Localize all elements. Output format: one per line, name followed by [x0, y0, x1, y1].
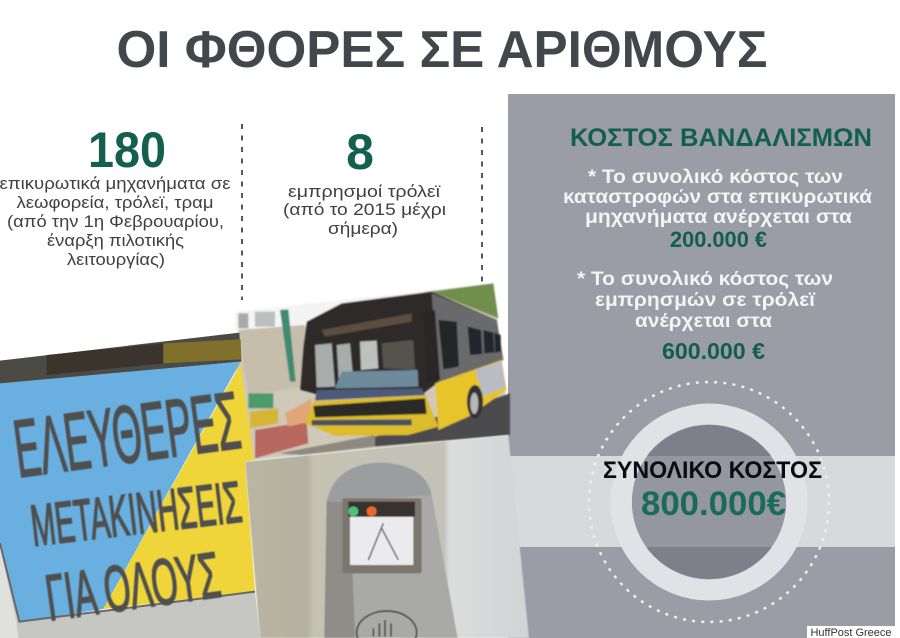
graffiti text: ΜΕΤΑΚΙΝΗΣΕΙΣ	[27, 470, 245, 559]
cost note: trolleys	[577, 268, 833, 364]
contactless symbol	[357, 611, 417, 638]
validator screen	[342, 498, 422, 573]
panel background	[508, 94, 895, 638]
validator arch	[324, 463, 458, 638]
dotted ring	[589, 382, 829, 622]
description 180: λεωφορεία, τρόλεϊ, τραμ	[16, 193, 214, 212]
number 180: 180	[88, 122, 166, 178]
description 8: εμπρησμοί τρόλεϊ	[288, 182, 441, 201]
cost note: trolleys: 600.000 €	[662, 338, 765, 364]
panel: vandalism costs	[508, 94, 895, 638]
total cost band	[508, 456, 895, 547]
total cost inner disc	[632, 425, 786, 579]
inner disc band tint	[632, 456, 786, 547]
panel heading: ΚΟΣΤΟΣ ΒΑΝΔΑΛΙΣΜΩΝ	[570, 124, 872, 152]
stat: 8 trolley arsons	[283, 124, 446, 238]
graffiti text: ΓΙΑ ΟΛΟΥΣ	[41, 538, 225, 635]
divider right	[481, 127, 483, 284]
cost note: trolleys: ανέρχεται στα	[635, 310, 772, 332]
description 180: (από την 1η Φεβρουαρίου,	[7, 212, 224, 231]
photo: graffiti sign: ΕΛΕΥΘΕΡΕΣ	[9, 375, 245, 495]
description 180: λειτουργίας)	[67, 250, 165, 269]
description 180: έναρξη πιλοτικής	[47, 231, 184, 250]
blue field	[0, 362, 241, 622]
photo: smashed ticket validator	[245, 435, 529, 638]
cost note: validators	[563, 166, 872, 252]
description 8: σήμερα)	[328, 219, 398, 238]
cost note: validators: μηχανήματα ανέρχεται στα	[585, 206, 852, 228]
description 180	[0, 174, 231, 269]
title: ΟΙ ΦΘΟΡΕΣ ΣΕ ΑΡΙΘΜΟΥΣ	[116, 21, 768, 79]
status lights	[348, 506, 358, 516]
stat: 180 validators	[0, 122, 231, 269]
sign top strip	[0, 333, 241, 384]
graffiti text	[9, 375, 245, 635]
cost note: validators: καταστροφών στα επικυρωτικά	[563, 186, 872, 208]
total amount: 800.000€	[641, 485, 786, 523]
cost note: validators: 200.000 €	[670, 227, 767, 252]
description 180: επικυρωτικά μηχανήματα σε	[0, 174, 231, 193]
description 8	[283, 182, 446, 238]
yellow field	[103, 363, 255, 609]
photo: graffiti sign	[0, 333, 260, 638]
sign frame edge	[0, 543, 255, 622]
sign surroundings	[0, 543, 260, 638]
total label: ΣΥΝΟΛΙΚΟ ΚΟΣΤΟΣ	[603, 457, 822, 484]
total cost ring	[621, 414, 797, 590]
cost note: trolleys: * Το συνολικό κόστος των	[577, 268, 833, 290]
divider left	[241, 124, 243, 300]
cost note: trolleys: εμπρησμών σε τρόλεϊ	[595, 289, 816, 311]
number 8: 8	[346, 124, 374, 180]
cost note: validators: * Το συνολικό κόστος των	[588, 166, 843, 188]
description 8: (από το 2015 μέχρι	[283, 200, 446, 219]
photo: burnt trolley bus	[235, 283, 510, 460]
